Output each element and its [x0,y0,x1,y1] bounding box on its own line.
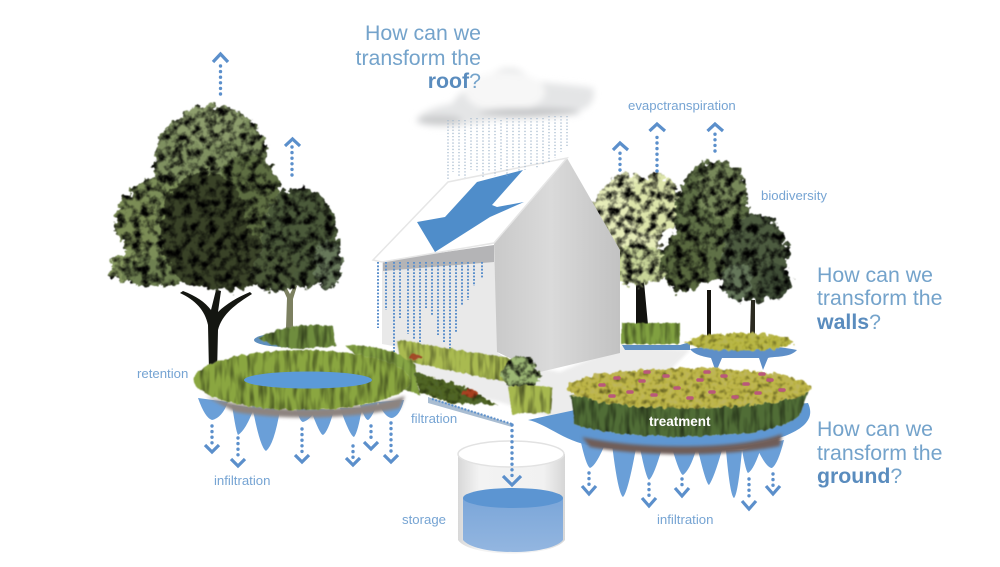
treatment island: right [528,368,811,498]
heading: ground: How can we [817,417,933,441]
blue plate [528,403,810,450]
back hedge right [622,323,680,344]
side wall [382,248,520,368]
planting body [570,392,808,436]
label: storage: storage [402,512,446,527]
storage tank [458,441,565,554]
tree: second left [253,188,342,328]
infiltration arrows right [582,473,780,509]
roof water shape [417,170,524,252]
label: infiltration left: infiltration [214,473,270,488]
tree: pale right [592,174,681,325]
wildflower top [567,368,811,408]
label: infiltration right: infiltration [657,512,713,527]
infiltration arrows left [205,423,398,466]
water running off the roof [378,262,482,352]
house [373,158,620,372]
label: evapotranspiration: evapctranspiration [628,98,736,113]
arrow: right 3 [708,124,723,151]
ground surface around the house [392,345,690,420]
pond island: left [194,350,410,451]
label: biodiversity: biodiversity [761,188,827,203]
small island: right [687,333,797,372]
heading: walls: ? [869,310,881,334]
tree: large left [111,105,282,374]
small island: back left [254,325,336,349]
heading: walls: walls [816,310,869,334]
gutter shadow band [383,245,494,271]
soil band [582,434,782,454]
arrow into tank [503,425,521,485]
heading: roof: ? [469,69,481,93]
wildflower pink dots [600,372,784,398]
round bush [503,356,539,392]
soil band [205,396,405,418]
heading: walls: transform the [817,286,942,310]
label: filtration: filtration [411,411,457,426]
tree: middle right [662,162,750,340]
arrow: tree 1 [213,54,228,94]
grass ring [194,350,410,410]
roof [373,158,567,262]
drips [580,438,784,498]
square bush [508,385,552,414]
heading: roof: How can we [365,21,481,45]
arrow: right 1 [613,143,628,170]
filtration channel [428,397,512,427]
cloud [416,68,594,127]
infiltration drips [198,398,404,451]
hedge along the house [345,340,520,395]
label: retention: retention [137,366,188,381]
tree: far right [722,214,791,335]
evapotranspiration arrows [213,54,723,175]
heading: roof: transform the [356,46,481,70]
label: treatment: treatment [649,414,711,429]
pond [244,372,372,388]
stored water [463,498,563,552]
gable wall [494,158,620,372]
arrow: tree 2 [285,139,300,175]
heading: ground: transform the [817,441,942,465]
heading: ground: ground [817,464,890,488]
planting bed with red flowers [408,354,498,405]
heading: walls: How can we [817,263,933,287]
heading: ground: ? [890,464,902,488]
blue channel at back right [622,342,690,350]
arrow: right 2 [650,124,665,171]
heading: roof: roof [428,69,470,93]
rain from cloud [448,116,567,180]
